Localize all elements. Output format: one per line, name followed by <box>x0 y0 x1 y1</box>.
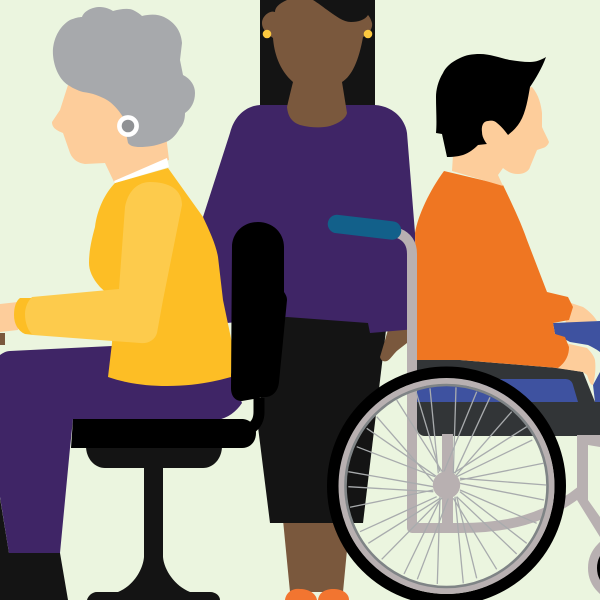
earring right <box>364 30 372 38</box>
lower hand <box>556 343 595 385</box>
push handle bar <box>398 233 582 528</box>
sleeve <box>25 182 182 343</box>
back connector <box>250 398 259 429</box>
earring left <box>263 30 271 38</box>
boot <box>0 498 68 600</box>
collar <box>114 158 169 183</box>
hearing aid <box>119 117 137 135</box>
wheelchair frame <box>398 233 600 598</box>
inner rim <box>346 385 548 587</box>
skirt <box>258 305 389 523</box>
seat cushion <box>417 379 578 402</box>
face and neck <box>452 87 549 186</box>
seat underside <box>86 446 222 468</box>
handle grip <box>337 224 392 230</box>
blouse <box>89 168 232 386</box>
blue sleeve <box>553 321 600 352</box>
upper hand <box>565 303 597 324</box>
front castor wheel <box>592 538 600 598</box>
figure: man in wheelchair <box>415 54 600 436</box>
spokes <box>348 387 546 584</box>
back rest <box>231 222 287 401</box>
hub <box>433 471 460 499</box>
wheelchair seat <box>417 360 600 436</box>
office chair <box>71 222 287 600</box>
neck and face <box>52 85 169 182</box>
chair base <box>87 465 220 600</box>
front strut <box>577 435 600 537</box>
hair <box>53 7 195 147</box>
centre strut <box>442 434 453 530</box>
hand <box>0 302 18 332</box>
figure: seated older woman <box>0 7 242 600</box>
tyre <box>333 372 560 600</box>
legs <box>283 520 350 592</box>
purple top <box>203 105 416 333</box>
hair backdrop <box>260 0 375 107</box>
trousers <box>0 346 242 553</box>
head and neck <box>262 0 372 127</box>
shoes <box>285 589 349 600</box>
desk edge <box>0 333 5 345</box>
main wheel <box>333 372 560 600</box>
cuff <box>14 298 34 335</box>
cushion far edge <box>593 372 600 402</box>
hair <box>436 54 546 157</box>
figure: standing woman <box>203 0 416 600</box>
ear <box>482 121 508 148</box>
rim <box>342 381 552 591</box>
seat <box>71 419 256 448</box>
jumper <box>415 171 573 368</box>
hand <box>380 326 407 361</box>
